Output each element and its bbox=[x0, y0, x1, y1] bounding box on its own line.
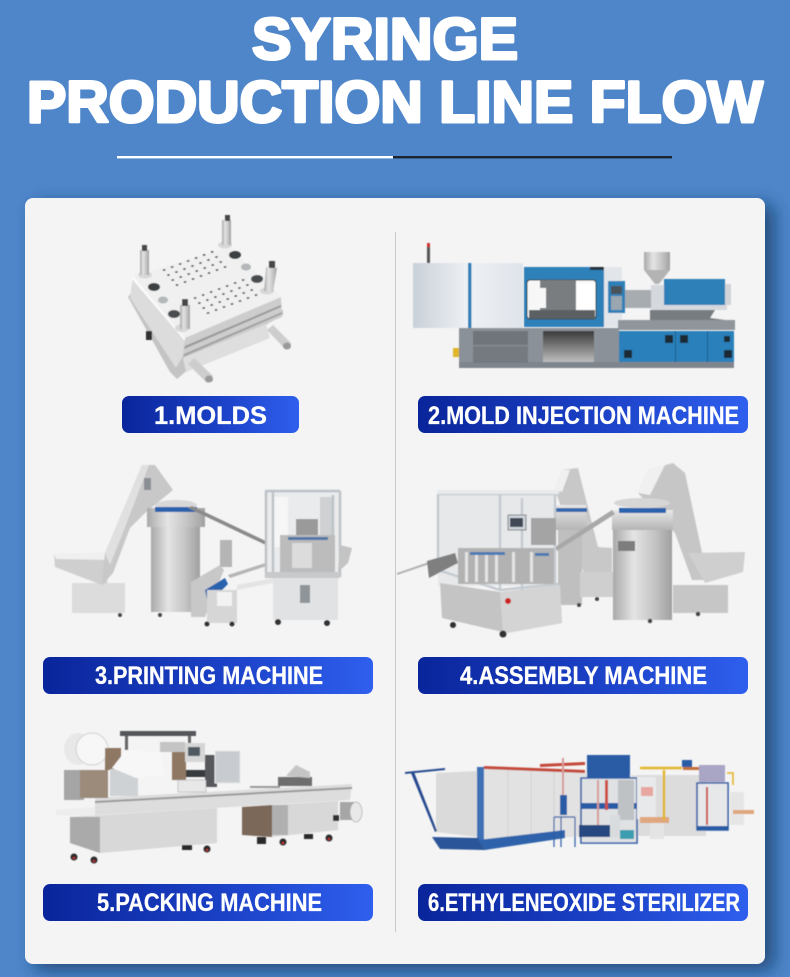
label: 1.MOLDS: 1.MOLDS bbox=[154, 402, 267, 430]
panel: assembly machine bbox=[397, 463, 748, 694]
label: 4.ASSEMBLY MACHINE bbox=[418, 657, 748, 694]
label: 2.MOLD INJECTION MACHINE bbox=[418, 396, 748, 433]
label: 6.ETHYLENEOXIDE STERILIZER bbox=[418, 884, 748, 921]
icon: assembly machine bbox=[397, 463, 745, 638]
label: 3.PRINTING MACHINE: 3.PRINTING MACHINE bbox=[95, 662, 323, 690]
panel: white card bbox=[25, 198, 765, 964]
title bbox=[27, 7, 763, 135]
icon: injection machine bbox=[413, 243, 735, 368]
icon: sterilizer bbox=[405, 755, 754, 850]
icon: packing machine bbox=[56, 731, 362, 864]
panel: printing machine bbox=[43, 465, 373, 694]
panel: mold injection machine bbox=[413, 243, 748, 433]
panel: ethyleneoxide sterilizer bbox=[405, 755, 754, 921]
label: 5.PACKING MACHINE: 5.PACKING MACHINE bbox=[97, 889, 322, 917]
icon: printing machine bbox=[54, 465, 352, 626]
panel: molds bbox=[122, 215, 299, 433]
panel: packing machine bbox=[43, 731, 373, 921]
icon: mold bbox=[128, 215, 291, 383]
label: 5.PACKING MACHINE bbox=[43, 884, 373, 921]
label: 3.PRINTING MACHINE bbox=[43, 657, 373, 694]
column divider bbox=[395, 232, 396, 932]
label: 2.MOLD INJECTION MACHINE: 2.MOLD INJECTION MACHINE bbox=[428, 402, 739, 430]
title underline bbox=[117, 156, 672, 158]
title: PRODUCTION LINE FLOW bbox=[27, 70, 763, 135]
label: 1.MOLDS bbox=[122, 396, 299, 433]
label: 4.ASSEMBLY MACHINE: 4.ASSEMBLY MACHINE bbox=[460, 662, 707, 690]
title: SYRINGE bbox=[252, 7, 518, 72]
